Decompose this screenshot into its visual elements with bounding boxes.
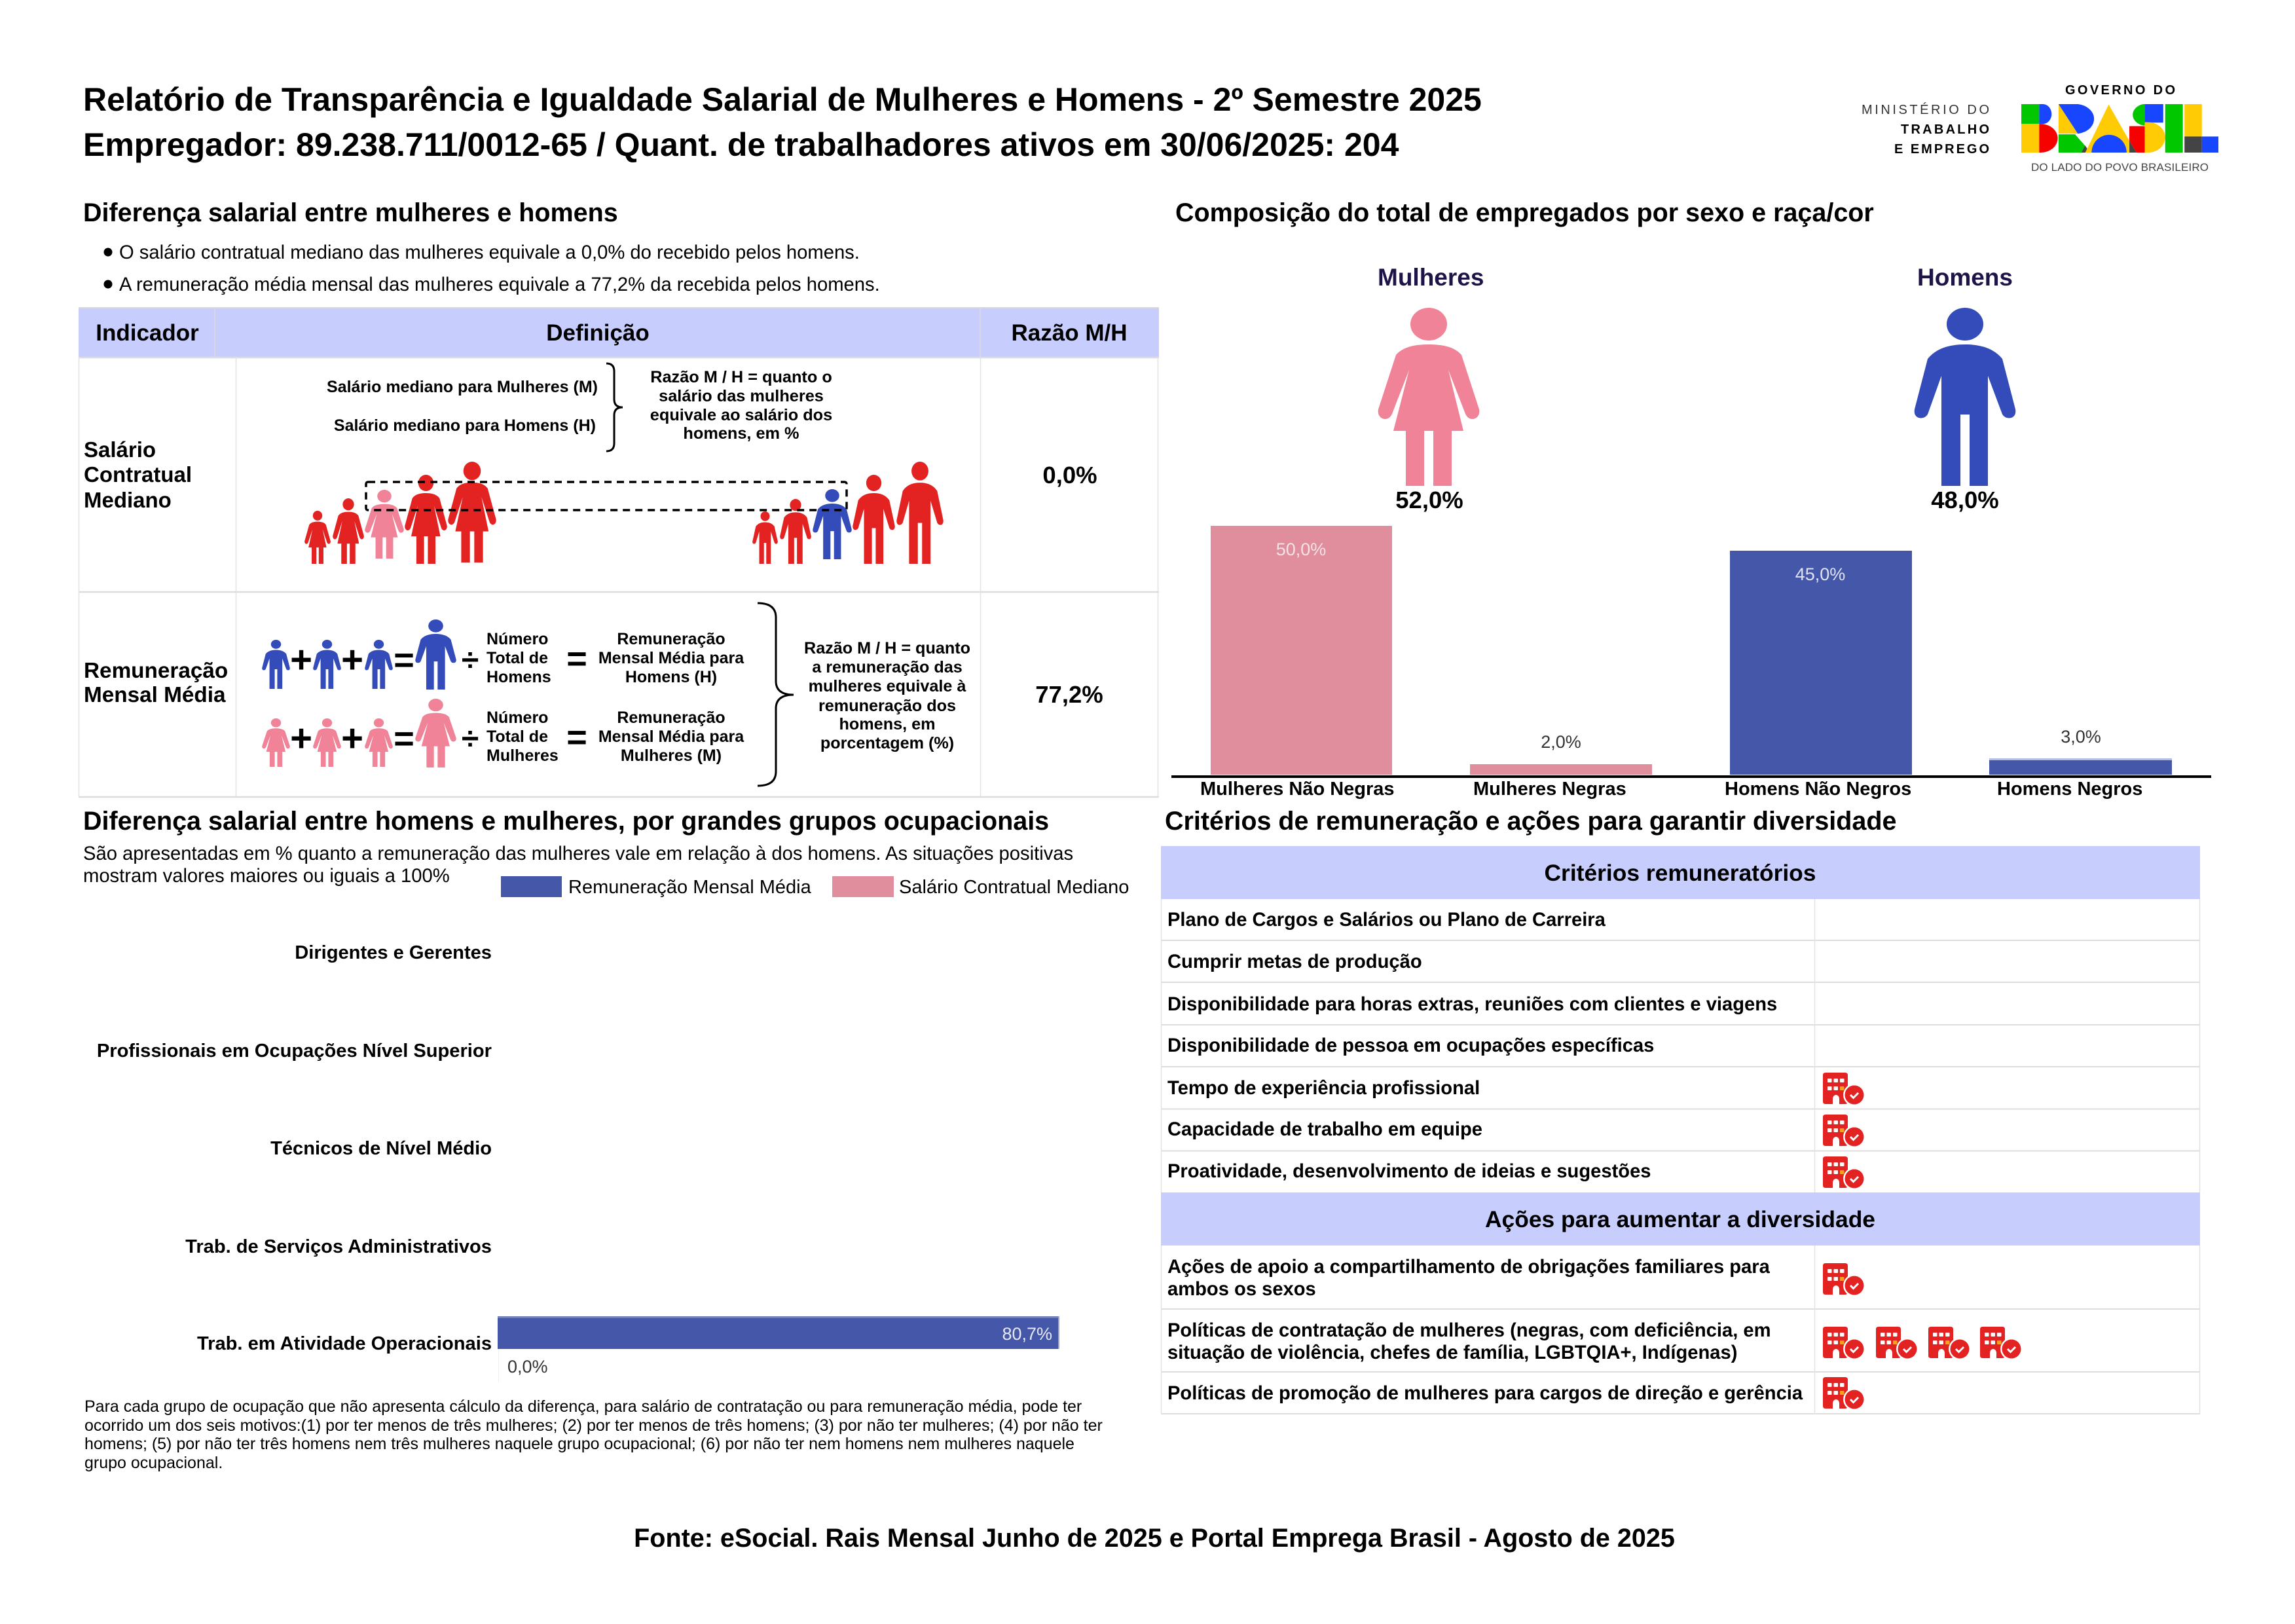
definition text: razão remuneração: mulheres equivale à (809, 677, 966, 695)
heading: diferença salarial: Diferença salarial entre mulheres e homens (83, 198, 618, 227)
band: critérios remuneratórios: Critérios remuneratórios (1545, 860, 1816, 886)
criteria rows: Capacidade de trabalho em equipe (1167, 1119, 1482, 1140)
criteria rows: Proatividade, desenvolvimento de ideias e sugestões (1167, 1161, 1651, 1182)
bar chart: composição: Homens Não Negros (1725, 779, 1911, 800)
bar chart: composição (1171, 526, 2211, 800)
bar chart: grupos ocupacionais: Técnicos de Nível Médio (270, 1138, 492, 1159)
row label: salário contratual mediano: Mediano (84, 488, 172, 512)
legend: Salário Contratual Mediano (899, 877, 1129, 898)
icon: homem (1915, 308, 2015, 486)
bullets: O salário contratual mediano das mulheres equivale a 0,0% do recebido pelos homens. (119, 242, 860, 263)
table header: Definição (546, 320, 650, 346)
bar chart: grupos ocupacionais: Profissionais em Ocupações Nível Superior (97, 1041, 492, 1061)
row label: salário contratual mediano: Salário (84, 437, 156, 462)
bar chart: grupos ocupacionais: 80,7% (1002, 1324, 1052, 1344)
table header: Indicador (96, 320, 199, 346)
logo: Ministério do Trabalho e Emprego: E EMPREGO (1894, 142, 1989, 157)
action rows: Políticas de promoção de mulheres para cargos de direção e gerência (1167, 1383, 1803, 1404)
criteria rows: Disponibilidade de pessoa em ocupações específicas (1167, 1035, 1654, 1056)
definition text: razão remuneração: remuneração dos (818, 697, 956, 715)
bar chart: composição: Homens Negros (1997, 779, 2142, 800)
heading: critérios: Critérios de remuneração e ações para garantir diversidade (1165, 807, 1896, 836)
bar chart: composição: 2,0% (1541, 732, 1581, 752)
brace (606, 363, 623, 451)
definition text: razão remuneração: homens, em (839, 715, 935, 733)
logo: Ministério do Trabalho e Emprego: MINISTÉRIO DO (1862, 102, 1989, 117)
formula: homens: Homens (H) (625, 668, 717, 686)
row label: remuneração mensal média (84, 659, 228, 707)
bar chart: grupos ocupacionais: Dirigentes e Gerentes (295, 942, 492, 963)
action rows: ambos os sexos (1167, 1279, 1316, 1300)
formula: mulheres: Remuneração (617, 709, 725, 727)
dashed median box (366, 482, 847, 510)
action rows: Políticas de contratação de mulheres (negras, com deficiência, em (1167, 1320, 1771, 1341)
description text: São apresentadas em % quanto a remuneração das mulheres vale em relação à dos homens. As situações positivas (83, 843, 1073, 864)
bar chart: grupos ocupacionais: Trab. de Serviços Administrativos (185, 1236, 492, 1257)
formula: homens: = (394, 640, 414, 680)
heading: diferença por grupos ocupacionais: Diferença salarial entre homens e mulheres, por grandes grupos ocupacionais (83, 807, 1049, 836)
formula: homens: = (566, 639, 587, 678)
description text: mostram valores maiores ou iguais a 100% (83, 866, 450, 887)
logo: Ministério do Trabalho e Emprego (1862, 102, 1989, 157)
table header: Razão M/H (1012, 320, 1127, 346)
footnote: homens; (5) por não ter três homens nem três mulheres naquele grupo ocupacional; (6) por não ter nem homens nem mulheres naquele (84, 1435, 1074, 1453)
criteria rows: Disponibilidade para horas extras, reuniões com clientes e viagens (1167, 994, 1777, 1015)
formula: mulheres: + (341, 717, 363, 760)
band: ações (1161, 1192, 2200, 1246)
criteria rows (1167, 910, 1777, 1182)
logo: Ministério do Trabalho e Emprego: TRABALHO (1901, 122, 1989, 137)
label: Homens: Homens (1917, 264, 2013, 291)
row label: remuneração mensal média: Mensal Média (84, 683, 226, 707)
definition text: razão (650, 368, 832, 443)
formula: mulheres: Número (487, 709, 548, 727)
title: Empregador: 89.238.711/0012-65 / Quant. de trabalhadores ativos em 30/06/2025: 204 (83, 126, 1399, 163)
footnote: ocorrido um dos seis motivos:(1) por ter menos de três mulheres; (2) por ter menos de três homens; (3) por não ter mulheres; (4) por não ter (84, 1416, 1103, 1435)
formula: homens (262, 619, 744, 690)
criteria rows: Cumprir metas de produção (1167, 951, 1422, 972)
heading: composição: Composição do total de empregados por sexo e raça/cor (1175, 198, 1874, 227)
title (83, 81, 1482, 163)
icons: actions companies (1823, 1263, 2023, 1411)
band: critérios remuneratórios (1161, 846, 2200, 899)
formula: mulheres (262, 699, 744, 767)
formula: homens: ÷ (462, 643, 479, 678)
row label: salário contratual mediano: Contratual (84, 462, 192, 487)
footnote: Para cada grupo de ocupação que não apresenta cálculo da diferença, para salário de contratação ou para remuneração média, pode ter (84, 1397, 1082, 1416)
definition text: razão remuneração: Razão M / H = quanto (804, 639, 970, 657)
criteria rows: Plano de Cargos e Salários ou Plano de Carreira (1167, 910, 1606, 931)
footnote (84, 1397, 1103, 1472)
definition text: razão: homens, em % (683, 424, 799, 443)
value: 48,0%: 48,0% (1931, 487, 1999, 513)
formula: homens: Número (487, 630, 548, 648)
value: 77,2%: 77,2% (1035, 681, 1103, 708)
formula: homens: + (341, 638, 363, 681)
formula: mulheres: Mulheres (487, 747, 559, 765)
label: Mulheres: Mulheres (1378, 264, 1484, 291)
formula: mulheres: Mulheres (M) (621, 747, 722, 765)
logo: Governo do Brasil (2021, 83, 2218, 174)
icons: men median row (752, 462, 944, 564)
action rows: situação de violência, chefes de família, LGBTQIA+, Indígenas) (1167, 1342, 1737, 1363)
bullets: A remuneração média mensal das mulheres equivale a 77,2% da recebida pelos homens. (119, 274, 880, 295)
bar chart: grupos ocupacionais: Trab. em Atividade Operacionais (197, 1333, 492, 1354)
formula: homens: Total de (487, 649, 548, 667)
definition text: mediano: Salário mediano para Mulheres (M) (327, 378, 598, 396)
formula: homens: + (290, 638, 312, 681)
formula: homens: Remuneração (617, 630, 725, 648)
formula: mulheres: Mensal Média para (598, 728, 744, 746)
formula: mulheres: = (394, 719, 414, 758)
bar chart: grupos ocupacionais: 0,0% (507, 1357, 548, 1376)
definition text: razão remuneração: a remuneração das (812, 658, 963, 676)
definition text: razão: salário das mulheres (659, 387, 824, 405)
band: ações: Ações para aumentar a diversidade (1485, 1206, 1875, 1232)
logo: Governo do Brasil: GOVERNO DO (2065, 83, 2175, 98)
definition text: razão remuneração: porcentagem (%) (820, 734, 954, 752)
definition text: razão: equivale ao salário dos (650, 406, 832, 424)
action rows (1167, 1257, 1803, 1404)
panel: tabela de indicadores (79, 308, 1159, 797)
action rows: Ações de apoio a compartilhamento de obrigações familiares para (1167, 1257, 1771, 1278)
definition text: mediano: Salário mediano para Homens (H) (334, 416, 596, 435)
logo: Governo do Brasil: DO LADO DO POVO BRASILEIRO (2031, 161, 2209, 174)
legend (501, 876, 1129, 898)
bar chart: composição: Mulheres Negras (1473, 779, 1626, 800)
formula: mulheres: Total de (487, 728, 548, 746)
formula: mulheres: + (290, 717, 312, 760)
bullets (103, 242, 880, 295)
criteria rows: Tempo de experiência profissional (1167, 1078, 1480, 1099)
formula: mulheres: ÷ (462, 722, 479, 756)
definition text: mediano (327, 378, 598, 435)
icons: criteria companies (1823, 1073, 1865, 1190)
bar chart: composição: 3,0% (2061, 727, 2101, 747)
icons: women median row (304, 462, 496, 564)
footnote: grupo ocupacional. (84, 1454, 223, 1472)
bar chart: composição: 45,0% (1795, 564, 1845, 584)
legend: Remuneração Mensal Média (568, 877, 812, 898)
bar chart: composição: 50,0% (1276, 540, 1326, 559)
bar chart: grupos ocupacionais (97, 942, 1059, 1382)
bar chart: composição: Mulheres Não Negras (1200, 779, 1395, 800)
description text (83, 843, 1073, 887)
icon: mulher (1378, 308, 1479, 486)
brace (758, 603, 794, 786)
table header (79, 308, 1159, 357)
source: Fonte: eSocial. Rais Mensal Junho de 2025 e Portal Emprega Brasil - Agosto de 2025 (634, 1524, 1675, 1553)
value: 0,0%: 0,0% (1042, 462, 1097, 489)
definition text: razão remuneração (804, 639, 970, 752)
definition text: razão: Razão M / H = quanto o (650, 368, 832, 386)
panel: critérios table (1161, 846, 2200, 1414)
formula: homens: Homens (487, 668, 551, 686)
formula: homens: Mensal Média para (598, 649, 744, 667)
row label: remuneração mensal média: Remuneração (84, 659, 228, 683)
row label: salário contratual mediano (84, 437, 192, 512)
value: 52,0%: 52,0% (1395, 487, 1463, 513)
title: Relatório de Transparência e Igualdade Salarial de Mulheres e Homens - 2º Semestre 2025 (83, 81, 1482, 118)
formula: mulheres: = (566, 718, 587, 757)
